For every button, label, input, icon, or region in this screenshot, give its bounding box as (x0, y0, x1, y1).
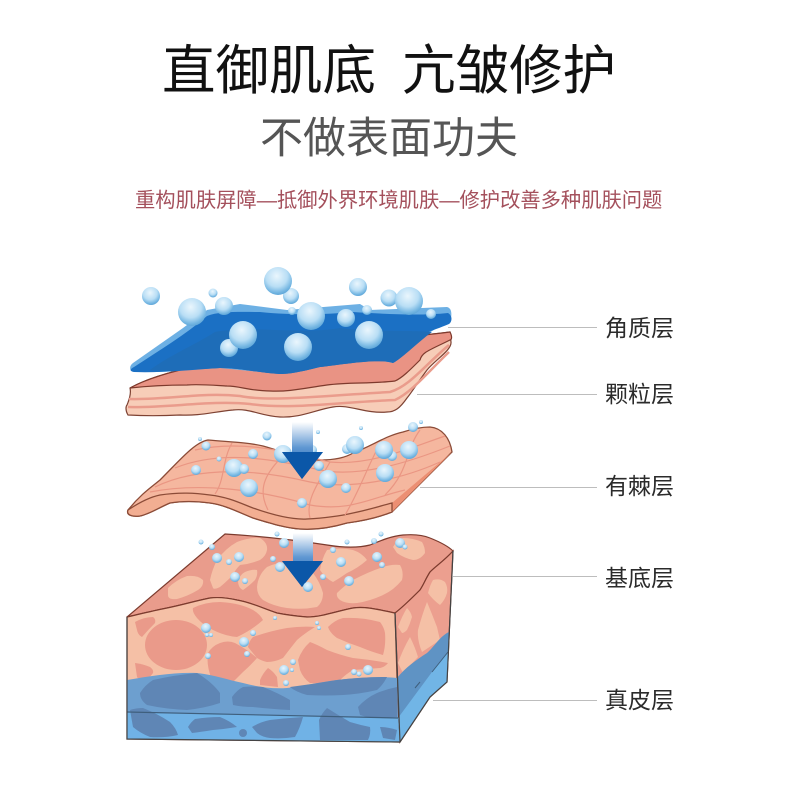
blue gel (130, 304, 452, 374)
water bubbles (142, 267, 436, 361)
top surface (127, 534, 453, 617)
arrow: upper (282, 422, 323, 479)
block outline (127, 551, 453, 742)
top surface cells (168, 538, 425, 609)
blue dermis front lower band (127, 712, 400, 742)
layer: spinous (128, 420, 452, 529)
label: 角质层: 角质层 (605, 315, 674, 341)
tagline: 重构肌肤屏障—抵御外界环境肌肤—修护改善多种肌肤问题 (135, 190, 662, 212)
front face cells (135, 602, 388, 690)
label: 有棘层: 有棘层 (605, 473, 674, 499)
pink sheet (126, 332, 452, 417)
label: 颗粒层: 颗粒层 (605, 381, 674, 407)
layer: stratum corneum and granular (126, 267, 452, 417)
label: 真皮层: 真皮层 (605, 687, 674, 713)
layer: basal and dermis block (127, 532, 453, 742)
leader lines (417, 328, 597, 700)
arrow: lower (282, 533, 323, 592)
title: 直御肌底 亢皱修护 (162, 42, 616, 101)
label: 基底层: 基底层 (605, 565, 674, 591)
blue dermis right (397, 632, 449, 742)
blue dermis front upper band (127, 673, 398, 718)
dermis cells (130, 673, 397, 740)
front face (127, 598, 399, 742)
bubbles on block (198, 532, 408, 686)
right face (395, 551, 453, 742)
subtitle: 不做表面功夫 (260, 115, 518, 163)
